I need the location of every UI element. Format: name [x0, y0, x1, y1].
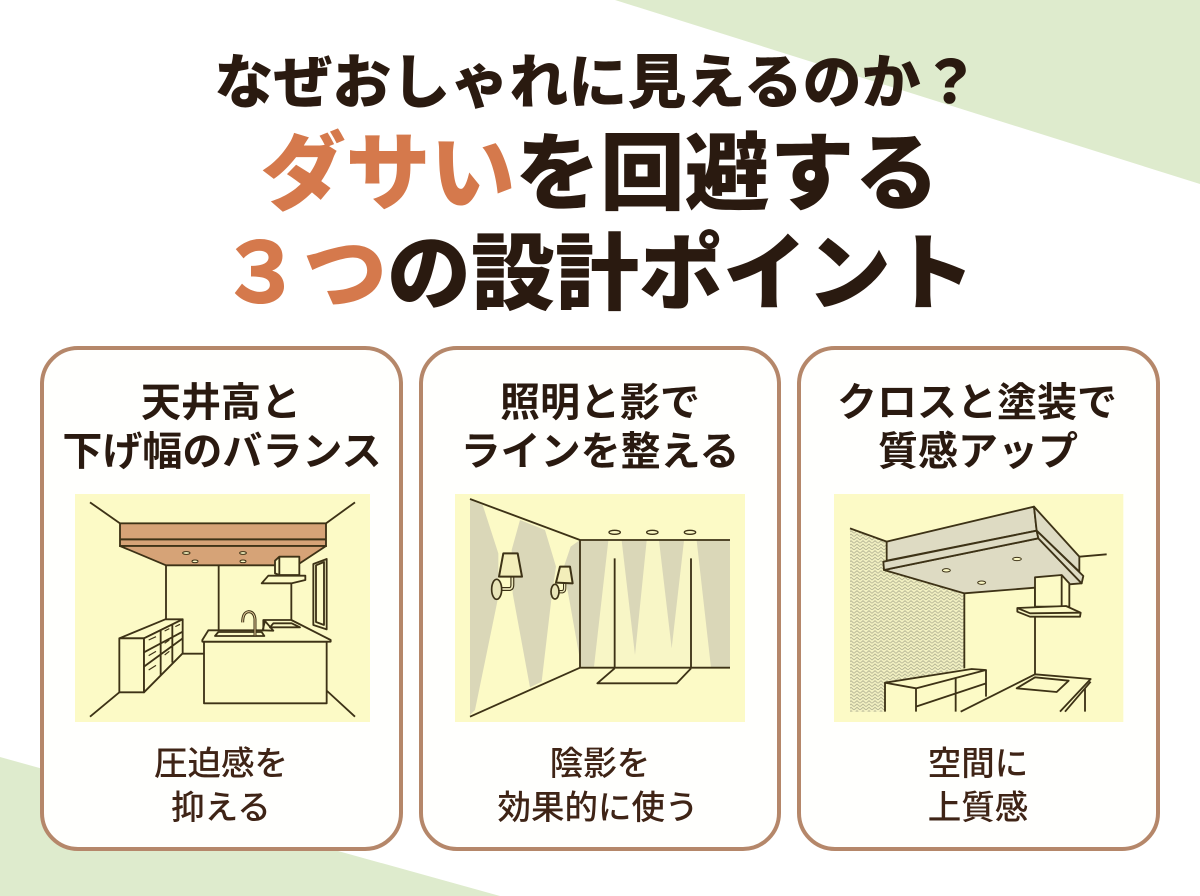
card caption 2: 効果的に使う: [498, 790, 698, 827]
illustration: kitchen with dropped ceiling: [75, 494, 370, 722]
card caption 1: 抑える: [171, 790, 271, 827]
background: bottom left green: [0, 757, 500, 896]
card heading 2: 照明と影で: [500, 381, 700, 425]
wall lamp large: [492, 553, 522, 599]
card caption 3: 上質感: [928, 790, 1028, 827]
card heading 1: 天井高と: [141, 381, 301, 425]
dropped ceiling: [120, 523, 326, 565]
window: [313, 559, 327, 629]
card frame 2: [421, 348, 779, 849]
card heading 1: 下げ幅のバランス: [62, 430, 382, 474]
title: [214, 50, 980, 321]
back wall shadows: [580, 540, 730, 668]
title line 3: ３つの設計ポイント: [219, 227, 975, 321]
card caption 1: [154, 746, 288, 827]
card caption 1: 圧迫感を: [154, 746, 288, 783]
card heading 2: [461, 381, 739, 474]
illustration: textured ceiling and wallpaper: [834, 494, 1123, 722]
card heading 3: [837, 381, 1117, 474]
card caption 3: 空間に: [928, 746, 1028, 783]
panel: wallpaper and paint: [799, 348, 1158, 849]
card caption 3: [928, 746, 1028, 827]
cabinet: [119, 619, 183, 692]
herringbone wallpaper: [850, 528, 964, 712]
card heading 3: 質感アップ: [878, 430, 1078, 474]
title line 2: ダサいを回避する: [261, 126, 939, 221]
panel: ceiling height balance: [42, 348, 401, 849]
card frame 3: [799, 348, 1158, 849]
downlights: [609, 530, 696, 534]
panel: lighting and shadow: [421, 348, 779, 849]
counters: [885, 669, 1091, 712]
kitchen island: [202, 612, 331, 703]
card heading 2: ラインを整える: [461, 430, 739, 474]
card heading 1: [62, 381, 382, 474]
textured dropped ceiling: [883, 507, 1083, 593]
background: top right green: [615, 0, 1200, 184]
range hood: [262, 557, 305, 583]
card caption 2: [498, 746, 698, 827]
illustration: wall lights and shadows: [455, 494, 745, 722]
left wall shadows: [470, 500, 580, 715]
range hood: [1017, 575, 1081, 617]
card frame 1: [42, 348, 401, 849]
card heading 3: クロスと塗装で: [837, 381, 1117, 425]
wall lamp small: [551, 567, 573, 599]
card caption 2: 陰影を: [550, 746, 650, 783]
title line 1: なぜおしゃれに見えるのか？: [214, 50, 980, 116]
